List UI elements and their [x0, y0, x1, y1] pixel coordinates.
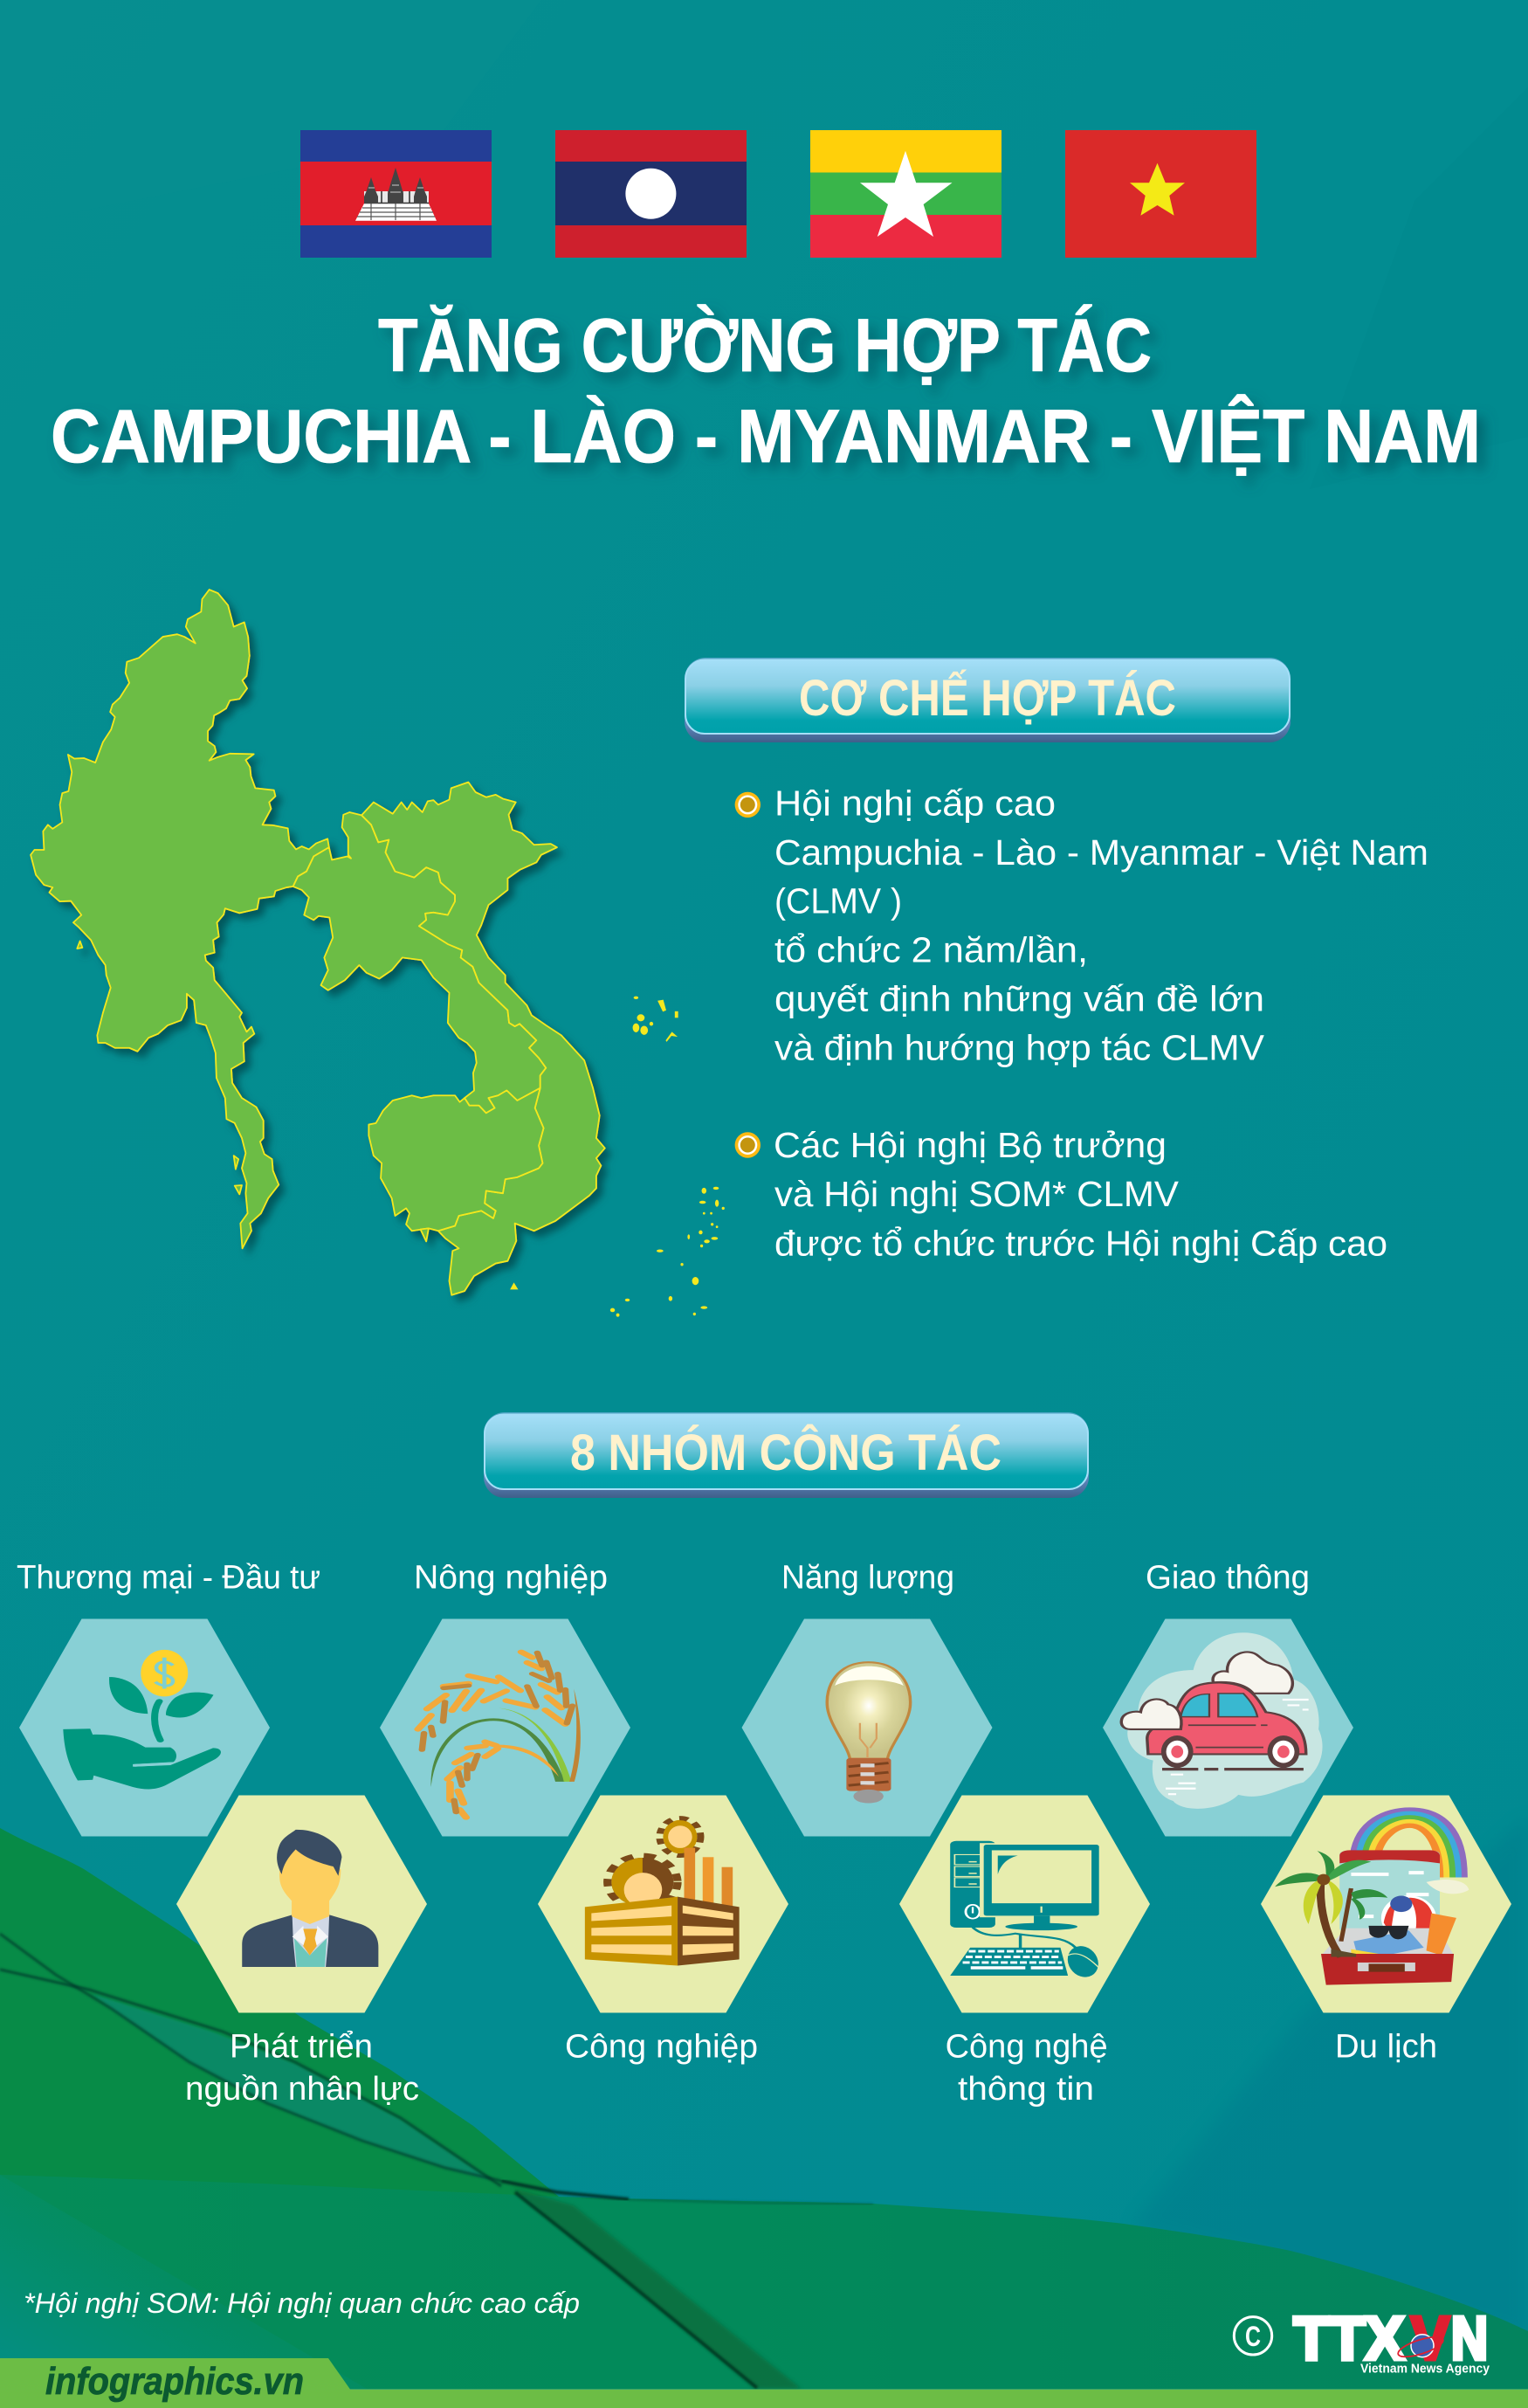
logo letters: TTX	[1294, 2304, 1405, 2372]
text block: summit: và định hướng hợp tác CLMV	[774, 1028, 1265, 1068]
bullet 1	[735, 792, 761, 818]
label: Nông nghiệp	[414, 1560, 608, 1597]
title: TĂNG CƯỜNG HỢP TÁC	[378, 304, 1152, 388]
title	[51, 304, 1481, 479]
group: human resources	[176, 1796, 427, 2108]
label: Thương mại - Đầu tư	[17, 1560, 320, 1597]
flags row	[300, 130, 1256, 258]
label: Năng lượng	[781, 1560, 954, 1597]
site name: infographics.vn	[45, 2360, 304, 2403]
label: nguồn nhân lực	[185, 2071, 419, 2108]
footer tab	[0, 2358, 351, 2391]
hexagon	[538, 1796, 788, 2012]
bullet 2	[735, 1132, 761, 1158]
flag: Laos	[555, 130, 747, 258]
icon: light bulb	[827, 1662, 911, 1804]
button: Cơ chế hợp tác	[685, 658, 1291, 742]
map: islands	[510, 997, 725, 1317]
group: information technology	[899, 1796, 1150, 2108]
globe	[1396, 2333, 1445, 2361]
hexagon	[19, 1619, 270, 1836]
label	[946, 2028, 1108, 2108]
label: Giao thông	[1146, 1560, 1310, 1597]
logo letters: N	[1451, 2304, 1488, 2372]
icon: factory with gears	[585, 1818, 740, 1966]
copyright mark	[1234, 2317, 1272, 2355]
text block: ministers: được tổ chức trước Hội nghị Cấp cao	[774, 1223, 1387, 1263]
text block: summit	[774, 783, 1428, 1068]
icon: suitcase with rainbow and palm	[1275, 1810, 1469, 1985]
text block: summit: Campuchia - Lào - Myanmar - Việt Nam	[774, 832, 1428, 873]
map of CLMV countries	[31, 590, 725, 1317]
hexagon	[1261, 1796, 1511, 2012]
icon: businessman	[242, 1830, 378, 1967]
group: agriculture	[380, 1560, 630, 1836]
text block: summit: tổ chức 2 năm/lần,	[774, 929, 1088, 969]
text block: summit: Hội nghị cấp cao	[774, 783, 1056, 824]
hexagon	[1103, 1619, 1353, 1836]
group: energy	[742, 1560, 992, 1836]
hexagon	[742, 1619, 992, 1836]
button: Cơ chế hợp tác: CƠ CHẾ HỢP TÁC	[799, 670, 1176, 727]
logo letters	[1294, 2304, 1488, 2372]
agency name: Vietnam News Agency	[1360, 2363, 1490, 2377]
panel: cooperation mechanism text	[735, 783, 1428, 1263]
text block: summit: (CLMV )	[774, 880, 902, 921]
hexagon	[899, 1796, 1150, 2012]
group: tourism	[1261, 1796, 1511, 2065]
group: transport	[1103, 1560, 1353, 1836]
button: 8 nhóm công tác: 8 NHÓM CÔNG TÁC	[570, 1425, 1001, 1481]
icon: rice	[418, 1652, 581, 1818]
label: thông tin	[958, 2071, 1094, 2108]
footer bar	[0, 2358, 1528, 2408]
icon: computer	[950, 1841, 1102, 1978]
flag: Cambodia	[300, 130, 492, 258]
hexagon	[176, 1796, 427, 2012]
decorative green waves	[0, 1828, 1528, 2389]
text block: ministers	[774, 1125, 1387, 1263]
text block: ministers: và Hội nghị SOM* CLMV	[774, 1174, 1180, 1214]
map: Laos	[293, 812, 546, 1113]
label: Phát triển	[230, 2028, 373, 2065]
label: Công nghệ	[946, 2028, 1108, 2065]
icon: money plant in hand	[63, 1650, 221, 1789]
label	[185, 2028, 419, 2108]
label: Công nghiệp	[565, 2028, 758, 2065]
text block: summit: quyết định những vấn đề lớn	[774, 978, 1264, 1018]
hexagon	[380, 1619, 630, 1836]
label: Du lịch	[1335, 2028, 1437, 2065]
flag: Vietnam	[1065, 130, 1256, 258]
map: Myanmar	[31, 590, 329, 1248]
icon: car and clouds	[1121, 1632, 1323, 1809]
button: 8 nhóm công tác	[484, 1412, 1089, 1498]
group: industry	[538, 1796, 788, 2065]
map: Cambodia	[368, 1088, 544, 1231]
logo: TTXVN	[1234, 2304, 1490, 2377]
logo letters: V	[1411, 2304, 1449, 2372]
copyright mark: C	[1245, 2321, 1261, 2352]
flag: Myanmar	[810, 130, 1001, 258]
group: trade and investment	[17, 1560, 320, 1836]
map: Vietnam	[361, 783, 605, 1295]
footnote: *Hội nghị SOM: Hội nghị quan chức cao cấp	[24, 2287, 580, 2319]
text block: ministers: Các Hội nghị Bộ trưởng	[774, 1125, 1167, 1165]
panel: 8 working groups	[17, 1560, 1511, 2108]
